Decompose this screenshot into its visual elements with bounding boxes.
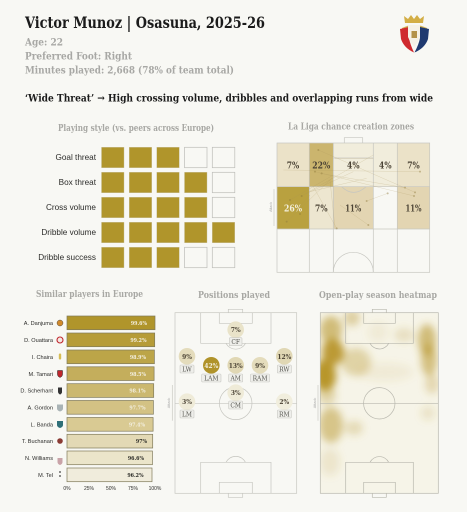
position CF: CF: [231, 338, 240, 346]
row: dribble success: Dribble success: [38, 253, 96, 262]
heatmap pitch: [320, 309, 438, 497]
player names: N. Williams: [25, 456, 53, 462]
heading: similar players: Similar players in Europe: [36, 290, 143, 300]
panel: similar players: [20, 290, 162, 492]
position RAM: RAM: [253, 374, 267, 382]
axis labels: 75%: [128, 486, 139, 492]
player names: A. Danjuma: [24, 321, 54, 327]
position CF: 7%: [231, 326, 241, 334]
position LAM: [202, 357, 221, 382]
bar values: 99.2%: [130, 338, 147, 344]
bar values: 97.7%: [129, 406, 146, 412]
player details: Preferred Foot: Right: [25, 50, 133, 62]
position RW: RW: [279, 365, 290, 373]
bar values: [127, 321, 147, 479]
position RM: [276, 393, 293, 418]
position LM: [179, 393, 195, 418]
heatmap density: [314, 310, 439, 493]
row: goal threat: [55, 147, 235, 168]
pitch lines: [277, 138, 430, 272]
player details: [24, 36, 234, 76]
player names: M. Tel: [38, 473, 53, 479]
position LM: 3%: [182, 398, 192, 406]
bar values: 96.6%: [128, 456, 144, 462]
position LW: [179, 348, 195, 373]
row: box threat: [59, 172, 235, 193]
player names: T. Buchanan: [22, 439, 53, 445]
position LM: LM: [182, 410, 192, 418]
panel: chance creation zones: [269, 122, 430, 272]
icon: Osasuna crest: [400, 15, 429, 52]
position RW: 12%: [277, 353, 292, 361]
bar values: 98.9%: [130, 355, 146, 361]
axis labels: 50%: [106, 486, 117, 492]
position CM: 3%: [231, 389, 241, 397]
player names: L. Banda: [31, 422, 54, 428]
position CM: [227, 384, 244, 409]
zone percentages: 7%: [315, 204, 328, 214]
player names: A. Gordon: [28, 406, 53, 412]
zone fills: [277, 143, 430, 229]
zone percentages: 22%: [312, 160, 330, 172]
attack direction: Attack: [269, 202, 273, 212]
position AM: 13%: [229, 362, 243, 370]
player names: D. Ouattara: [24, 338, 54, 344]
club badges: [57, 320, 63, 477]
position AM: [227, 357, 244, 382]
attack direction: [167, 385, 172, 421]
bar values: 97%: [136, 439, 147, 445]
zone percentages: 11%: [406, 204, 422, 214]
row: dribble volume: [41, 222, 235, 243]
chance creation passes: [283, 149, 421, 229]
row: dribble volume: Dribble volume: [41, 228, 96, 237]
bar values: 98.1%: [129, 388, 146, 394]
position RAM: 9%: [255, 362, 265, 370]
zone percentages: 4%: [379, 160, 392, 172]
position LAM: LAM: [204, 374, 218, 382]
row: box threat: Box threat: [59, 178, 97, 187]
tagline: ‘Wide Threat’ → High crossing volume, dribbles and overlapping runs from wide: [25, 92, 433, 104]
attack direction: [269, 189, 274, 226]
axis labels: 100%: [149, 486, 162, 492]
axis labels: [63, 486, 162, 492]
zone percentages: 7%: [287, 160, 299, 172]
bar values: 99.6%: [131, 321, 147, 327]
attack direction: [313, 385, 318, 421]
positions pitch: [175, 309, 297, 497]
position CM: CM: [230, 401, 241, 409]
position RM: RM: [279, 410, 290, 418]
row: cross volume: Cross volume: [46, 203, 96, 212]
panel: positions played: [167, 291, 297, 497]
position LW: 9%: [182, 353, 192, 361]
zone percentages: [284, 160, 422, 214]
zone percentages: 26%: [284, 204, 302, 214]
player names: I. Chaira: [32, 355, 54, 361]
title: Victor Munoz | Osasuna, 2025-26: [24, 13, 265, 32]
attack direction: Attack: [313, 398, 317, 408]
heading: playing style: Playing style (vs. peers across Europe): [58, 123, 214, 134]
position CF: [227, 321, 244, 346]
player names: D. Scherhant: [20, 388, 53, 394]
player details: Minutes played: 2,668 (78% of team total): [25, 64, 234, 76]
axis labels: 0%: [63, 486, 71, 492]
player names: [20, 321, 54, 479]
player names: M. Tamari: [29, 372, 53, 378]
position RW: [276, 348, 293, 373]
heading: positions played: Positions played: [198, 291, 270, 301]
row: cross volume: [46, 197, 235, 218]
player details: Age: 22: [24, 36, 63, 48]
position RAM: [250, 357, 270, 382]
zone percentages: 11%: [345, 204, 361, 214]
attack direction: Attack: [167, 398, 171, 408]
position LAM: 42%: [204, 362, 219, 370]
position RM: 2%: [279, 398, 290, 406]
row: goal threat: Goal threat: [55, 153, 97, 162]
row: dribble success: [38, 247, 235, 268]
bar values: 97.4%: [129, 422, 145, 428]
zone percentages: 7%: [407, 160, 420, 172]
panel: season heatmap: [313, 291, 439, 497]
position AM: AM: [230, 374, 241, 382]
position LW: LW: [182, 365, 193, 373]
similarity bars: [67, 316, 155, 482]
bar values: 98.5%: [130, 372, 146, 378]
bar values: 96.2%: [127, 473, 144, 479]
heading: chance creation zones: La Liga chance creation zones: [288, 122, 415, 132]
heading: season heatmap: Open-play season heatmap: [319, 291, 437, 301]
panel: playing style: [38, 123, 235, 268]
axis labels: 25%: [84, 486, 95, 492]
zone percentages: 4%: [347, 160, 360, 172]
